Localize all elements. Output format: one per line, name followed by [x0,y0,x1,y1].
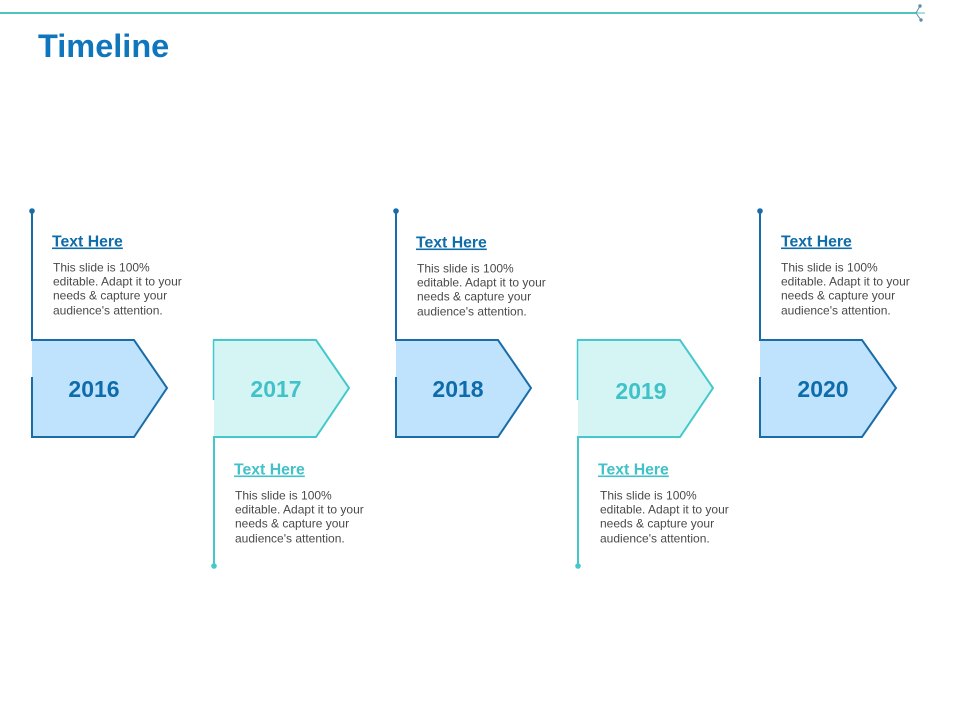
text block: 2016: editable. Adapt it to your [53,274,182,288]
top rule [0,12,916,14]
year: 2016: 2016 [68,376,120,402]
text block: 2018: needs & capture your [417,290,531,304]
text block: 2017: editable. Adapt it to your [235,502,364,516]
text block: 2016: This slide is 100% [53,260,150,274]
arrow: 2017 [213,340,349,437]
year: 2020: 2020 [797,376,849,402]
title: Timeline [38,28,169,64]
text block: 2018: This slide is 100% [417,262,514,276]
arrow: 2016 [31,340,167,437]
text block: 2020: This slide is 100% [781,260,878,274]
year: 2018: 2018 [432,376,484,402]
arrow: 2020 [759,340,896,437]
heading: 2020: Text Here [781,234,852,250]
year: 2019: 2019 [615,378,667,404]
timeline item: 2016 [29,208,182,437]
text block: 2018: editable. Adapt it to your [417,276,546,290]
connector: 2016 [29,208,35,340]
heading: 2016: Text Here [52,234,123,250]
timeline item: 2019 [575,340,729,569]
text block: 2020: audience's attention. [781,304,891,318]
timeline item: 2017 [211,340,364,569]
year: 2017: 2017 [250,376,302,402]
icon: top-right connector [916,5,925,21]
text block: 2019: audience's attention. [600,532,710,546]
text block: 2020: editable. Adapt it to your [781,274,910,288]
text block: 2019: needs & capture your [600,516,714,530]
connector: 2019 [575,437,581,569]
connector: 2017 [211,437,217,569]
text block: 2018: audience's attention. [417,304,527,318]
connector: 2018 [393,208,399,340]
text block: 2016: needs & capture your [53,288,167,302]
heading: 2019: Text Here [598,462,669,478]
connector: 2020 [757,208,763,340]
heading: 2018: Text Here [416,234,487,252]
arrow: 2019 [577,340,713,437]
timeline item: 2020 [757,208,910,437]
text block: 2019: This slide is 100% [600,488,697,502]
timeline item: 2018 [393,208,546,437]
text block: 2017: This slide is 100% [235,488,332,502]
text block: 2017: audience's attention. [235,532,345,546]
text block: 2016: audience's attention. [53,304,163,318]
heading: 2017: Text Here [234,462,305,478]
text block: 2020: needs & capture your [781,288,895,302]
text block: 2017: needs & capture your [235,516,349,530]
text block: 2019: editable. Adapt it to your [600,502,729,516]
arrow: 2018 [395,340,531,437]
